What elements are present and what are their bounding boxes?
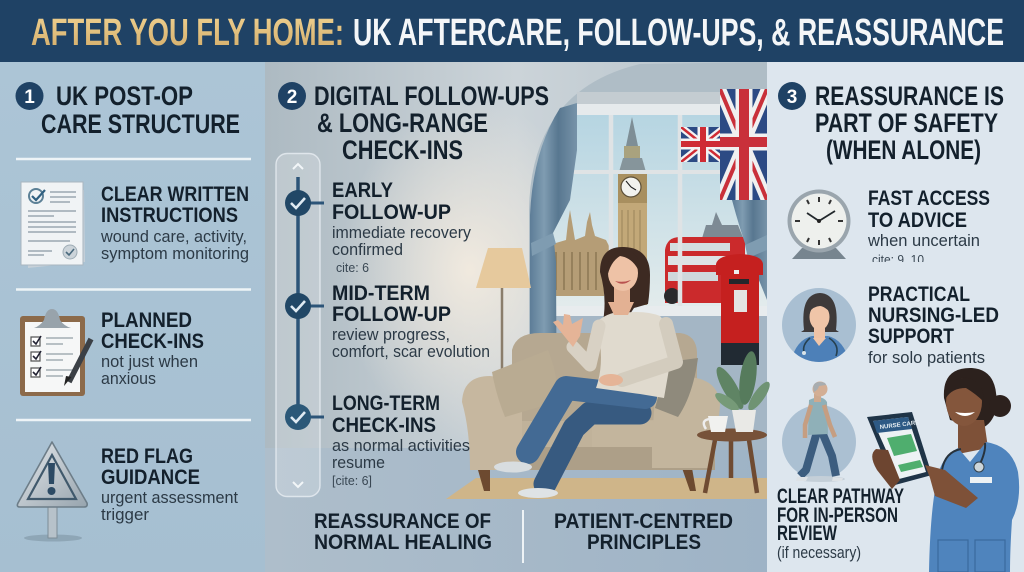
panel 2 heading: DIGITAL FOLLOW-UPS (314, 81, 549, 111)
panel 1 heading: UK POST-OP (56, 81, 193, 111)
nurse with tablet: NURSE CARE (880, 420, 920, 431)
neck (958, 420, 988, 454)
lamp (476, 248, 531, 372)
text: fast access to advice: FAST ACCESS (868, 187, 990, 210)
text: fast access to advice: cite: 9, 10 (872, 252, 924, 267)
panel: middle scene (265, 62, 767, 572)
distant dome building (700, 212, 746, 245)
text: clear pathway for in-person review: REVIEW (777, 522, 837, 545)
text: planned check-ins: anxious (101, 369, 156, 388)
head (946, 378, 982, 426)
scrubs (929, 442, 1019, 572)
hair back (600, 247, 650, 326)
left arm (462, 376, 522, 470)
text: clear written instructions: INSTRUCTIONS (101, 204, 238, 227)
panel 3 heading: 3 (787, 87, 797, 108)
hair back and bun (944, 368, 996, 428)
large Union flag (720, 89, 767, 200)
text: planned check-ins (101, 309, 204, 388)
text: clear written instructions: CLEAR WRITTEN (101, 183, 249, 206)
small Union flag (681, 127, 720, 162)
text: reassurance of normal healing: NORMAL HEALING (314, 531, 492, 554)
icon: written instructions document (21, 182, 85, 268)
right arm (652, 377, 720, 468)
sweater (596, 312, 672, 398)
panel 1 heading: CARE STRUCTURE (41, 109, 240, 139)
text: early follow-up (332, 179, 471, 275)
icon: walking patient (782, 382, 856, 482)
title (31, 12, 1004, 54)
panel 1 heading (16, 81, 240, 139)
panel 3 heading: (WHEN ALONE) (826, 135, 981, 165)
early follow-up marker (285, 190, 324, 216)
floor (265, 448, 767, 572)
hands and arm (872, 449, 900, 489)
Houses of Parliament (549, 210, 616, 296)
Big Ben (618, 117, 647, 305)
icon: nurse portrait (782, 288, 856, 365)
face and neck (614, 286, 630, 302)
text: red flag guidance (101, 445, 238, 524)
cushion left (492, 350, 557, 417)
text: clear pathway for in-person review: FOR IN-PERSON (777, 504, 898, 527)
header bar (0, 0, 1024, 62)
text: early follow-up: immediate recovery (332, 223, 471, 242)
text: mid-term follow-up (332, 282, 490, 361)
window with London view (549, 92, 767, 450)
panel 2 heading: 2 (287, 87, 297, 108)
text: mid-term follow-up: review progress, (332, 325, 450, 344)
tablet (867, 412, 932, 485)
text: long-term check-ins: resume (332, 453, 385, 472)
panel 3 heading (778, 81, 1004, 165)
long-term check-ins marker (285, 404, 324, 430)
icon: warning sign (17, 442, 87, 542)
text: planned check-ins: not just when (101, 352, 198, 371)
text: red flag guidance: GUIDANCE (101, 466, 200, 489)
mid-term follow-up marker (285, 293, 324, 319)
icon: clock (788, 190, 850, 259)
text: practical nursing-led support: SUPPORT (868, 325, 954, 348)
plant (712, 350, 773, 432)
panel 2 heading: & LONG-RANGE (317, 108, 488, 138)
stethoscope (942, 443, 985, 482)
window mullions (611, 115, 680, 313)
text: patient-centred principles (554, 510, 733, 554)
text: long-term check-ins: LONG-TERM (332, 392, 440, 415)
rug (446, 478, 767, 499)
hands (553, 314, 583, 347)
side table with cup and plant (697, 350, 773, 493)
text: reassurance of normal healing (314, 510, 492, 554)
text: red flag guidance: RED FLAG (101, 445, 193, 468)
icon: clipboard with checklist (20, 309, 91, 396)
postbox (716, 254, 763, 365)
text: clear pathway for in-person review: (if necessary) (777, 543, 861, 562)
text: long-term check-ins (332, 392, 470, 488)
text: planned check-ins: CHECK-INS (101, 330, 204, 353)
text: practical nursing-led support: for solo patients (868, 348, 985, 367)
text: early follow-up: EARLY (332, 179, 393, 202)
text: reassurance of normal healing: REASSURANCE OF (314, 510, 491, 533)
text: clear pathway for in-person review: CLEAR PATHWAY (777, 485, 904, 508)
text: mid-term follow-up: comfort, scar evolution (332, 342, 490, 361)
text: clear pathway for in-person review (777, 485, 904, 562)
panel: right background (767, 62, 1024, 572)
text: mid-term follow-up: MID-TERM (332, 282, 430, 305)
nurse with tablet (867, 368, 1019, 572)
bus (664, 237, 745, 304)
text: clear written instructions (100, 183, 249, 263)
panel 2 heading: CHECK-INS (342, 135, 463, 165)
text: long-term check-ins: as normal activities (332, 436, 470, 455)
text: clear written instructions: symptom monitoring (101, 244, 249, 263)
panel 1 heading: 1 (24, 87, 35, 108)
text: early follow-up: cite: 6 (336, 260, 369, 275)
text: practical nursing-led support (868, 283, 999, 367)
text: early follow-up: FOLLOW-UP (332, 201, 451, 224)
text: fast access to advice: TO ADVICE (868, 209, 967, 232)
timeline (276, 154, 324, 496)
text: mid-term follow-up: FOLLOW-UP (332, 303, 451, 326)
woman on sofa (494, 247, 676, 498)
cushion right (655, 358, 698, 417)
text: clear written instructions: wound care, activity, (100, 227, 247, 246)
text: practical nursing-led support: PRACTICAL (868, 283, 970, 306)
text: patient-centred principles: PATIENT-CENTRED (554, 510, 733, 533)
text: red flag guidance: trigger (101, 505, 149, 524)
text: long-term check-ins: CHECK-INS (332, 414, 436, 437)
text: patient-centred principles: PRINCIPLES (587, 531, 701, 554)
text: fast access to advice: when uncertain (867, 231, 980, 250)
panel 2 heading (278, 81, 549, 165)
title: AFTER YOU FLY HOME: (31, 12, 344, 54)
text: practical nursing-led support: NURSING-LED (868, 304, 999, 327)
text: fast access to advice (868, 190, 990, 262)
text: long-term check-ins: [cite: 6] (332, 473, 372, 488)
arched alcove wall (529, 62, 767, 450)
panel: left background (0, 62, 265, 572)
sofa (462, 333, 720, 491)
curtains (530, 103, 767, 470)
text: red flag guidance: urgent assessment (101, 488, 238, 507)
text: early follow-up: confirmed (332, 240, 403, 259)
text: planned check-ins: PLANNED (101, 309, 192, 332)
